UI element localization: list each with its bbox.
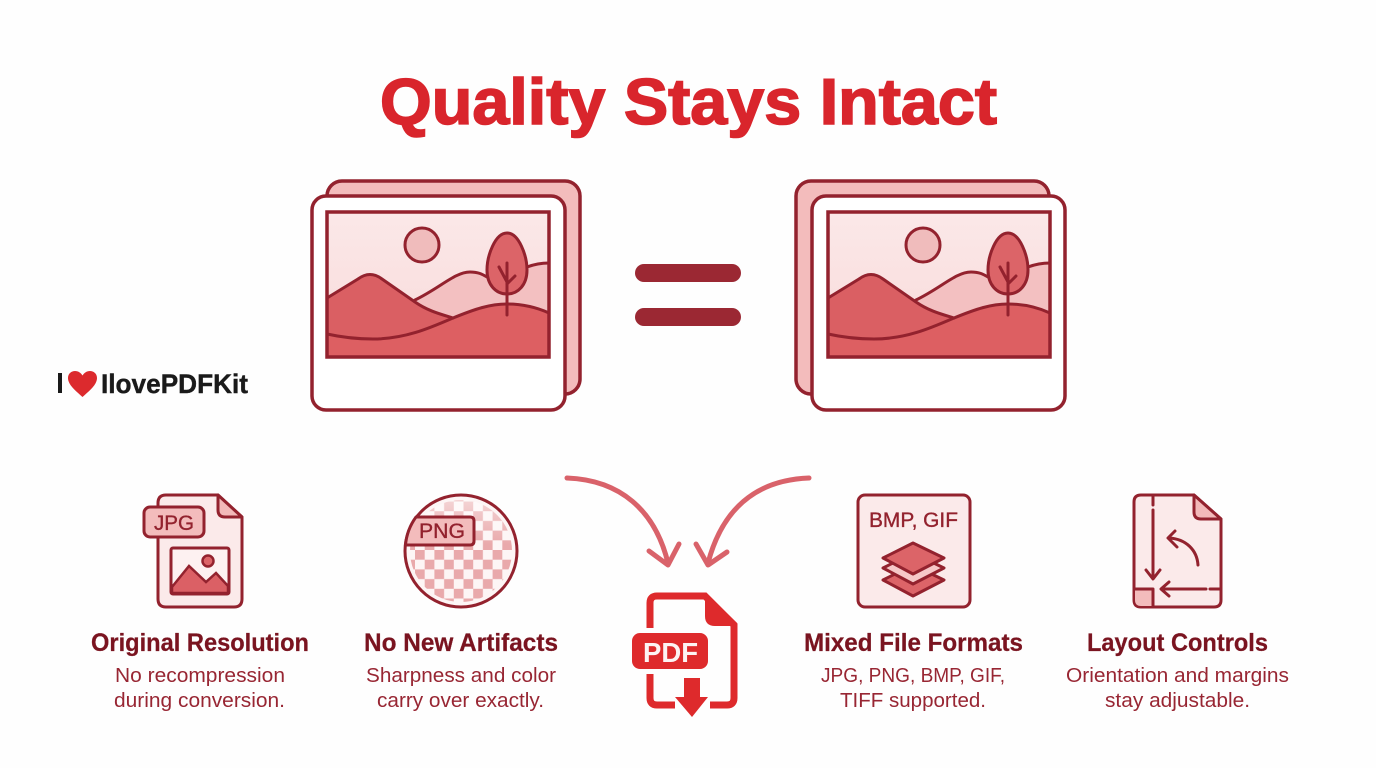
logo: I love PDFKit: IlovePDFKit — [101, 369, 248, 399]
title: Quality Stays Intact — [380, 65, 997, 138]
feature: original resolution: Original Resolution — [91, 629, 309, 657]
feature: no new artifacts: carry over exactly. — [377, 690, 544, 712]
icon: PNG transparency circle — [404, 494, 518, 608]
feature: layout controls: Orientation and margins — [1066, 665, 1289, 687]
feature: original resolution — [91, 629, 309, 712]
left image stack — [312, 181, 580, 410]
right image stack — [796, 181, 1065, 410]
feature: mixed file formats — [804, 629, 1023, 712]
feature: layout controls: Layout Controls — [1087, 629, 1268, 657]
feature: no new artifacts: No New Artifacts — [364, 629, 558, 657]
arrow: right curve into PDF — [696, 478, 809, 565]
icon: BMP, GIF mixed formats: BMP, GIF — [869, 509, 958, 532]
equals sign — [635, 264, 741, 326]
icon: layout controls — [1134, 495, 1221, 607]
arrow: left curve into PDF — [567, 478, 679, 565]
feature: mixed file formats: Mixed File Formats — [804, 629, 1023, 657]
feature: original resolution: No recompression — [115, 665, 285, 687]
icon: JPG file — [144, 495, 242, 607]
icon: PDF document: PDF — [643, 637, 698, 668]
feature: mixed file formats: TIFF supported. — [840, 690, 986, 712]
feature: layout controls — [1066, 629, 1289, 712]
icon: JPG file: JPG — [154, 512, 194, 535]
feature: no new artifacts: Sharpness and color — [366, 665, 556, 687]
feature: mixed file formats: JPG, PNG, BMP, GIF, — [821, 665, 1005, 687]
feature: no new artifacts — [364, 629, 558, 712]
feature: original resolution: during conversion. — [114, 690, 285, 712]
icon: PDF document — [632, 593, 737, 717]
icon: PNG transparency circle: PNG — [419, 520, 465, 543]
icon: BMP, GIF mixed formats — [858, 495, 970, 607]
feature: layout controls: stay adjustable. — [1105, 690, 1250, 712]
